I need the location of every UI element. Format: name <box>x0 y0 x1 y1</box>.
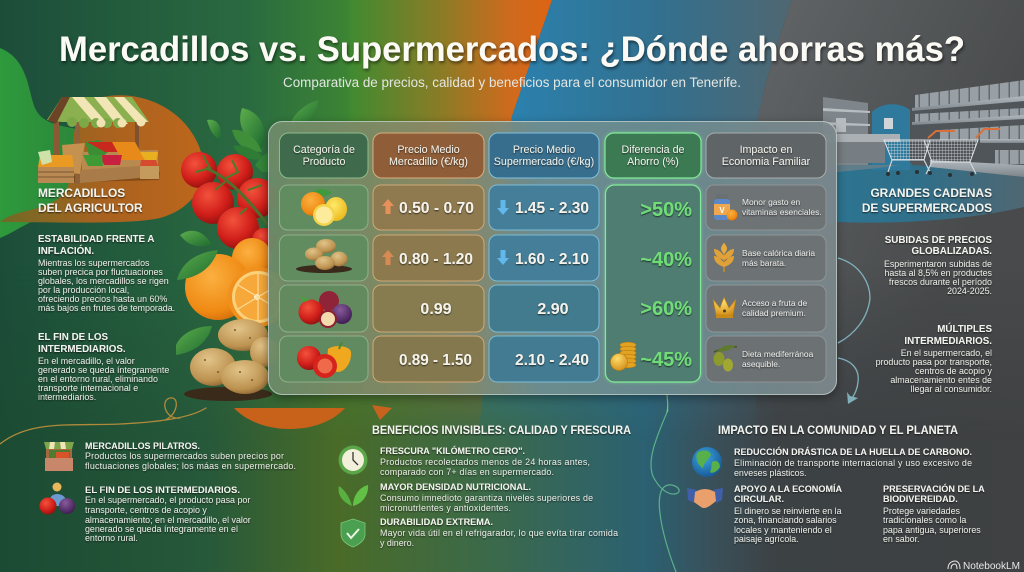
column: mercadillo prices: 0.80 - 1.20 <box>399 251 473 268</box>
column: family impact: calidad premium. <box>742 308 806 318</box>
column: family impact: Dieta mediferránoa <box>742 349 814 359</box>
block: mercadillos pilatros: Productos los supermercados suben precios por <box>85 451 284 461</box>
column: savings: ~45% <box>640 349 692 371</box>
subtitle: Comparativa de precios, calidad y beneficios para el consumidor en Tenerife. <box>283 75 741 90</box>
logo: NotebookLM: NotebookLM <box>963 560 1020 572</box>
block: intermediaries <box>38 332 169 402</box>
column: savings: Diferencia de <box>622 144 685 156</box>
column: supermercado prices: Supermercado (€/kg) <box>494 156 594 168</box>
illustration: potatoes <box>176 319 278 401</box>
column: family impact: vitaminas esenciales. <box>742 207 822 217</box>
block: end of intermediaries: entorno rural. <box>85 533 138 543</box>
block: freshness: comparado con 7+ días en supermercado. <box>380 467 554 477</box>
block: inflation: más bajos en frutes de temporada. <box>38 303 175 313</box>
column: savings <box>605 133 701 382</box>
icon: mini market stall <box>44 442 74 471</box>
block: biodiversity: tradicionales como la <box>883 515 966 525</box>
block: inflation: INFLACIÓN. <box>38 245 94 257</box>
icon: vitamin bottle: V <box>719 206 725 215</box>
block: price rises: 2024-2025. <box>947 286 992 296</box>
block: price rises: Esperimentaron subidas de <box>884 259 992 269</box>
block: circular economy <box>734 484 843 544</box>
block: circular economy: paisaje agrícola. <box>734 534 799 544</box>
heading: community and planet: IMPACTO EN LA COMUNIDAD Y EL PLANETA <box>718 423 958 437</box>
block: inflation: suben precica por fluctuaciones <box>38 267 163 277</box>
icon: shield <box>341 519 365 547</box>
block: biodiversity: PRESERVACIÓN DE LA <box>883 483 985 494</box>
illustration: shopping carts <box>884 129 1000 177</box>
block: end of intermediaries: EL FIN DE LOS INTERMEDIARIOS. <box>85 485 240 495</box>
block: nutrition: Consumo imnedioto garantiza niveles superiores de <box>380 493 593 503</box>
heading: supermarkets: GRANDES CADENAS <box>870 186 992 200</box>
block: nutrition: micronutrlentes y antioxidentes. <box>380 503 511 513</box>
block: circular economy: APOYO A LA ECONOMÍA <box>734 484 843 494</box>
block: carbon: Eliminación de transporte internacional y uso excesivo de <box>734 458 972 468</box>
block: carbon: enveses plásticos. <box>734 468 807 478</box>
block: circular economy: El dinero se reinvierte en la <box>734 506 842 516</box>
icon: citrus <box>301 189 347 226</box>
right column: supermarket text <box>862 186 993 394</box>
block: intermediaries: en el entorno rural, eliminando <box>38 374 158 384</box>
arrows: right of the panel <box>838 258 870 404</box>
block: intermediaries: INTERMEDIARIOS. <box>38 344 126 355</box>
icon: handshake <box>687 488 723 508</box>
column: mercadillo prices: 0.50 - 0.70 <box>399 200 474 217</box>
column: mercadillo prices: 0.89 - 1.50 <box>399 352 472 369</box>
column: family impact: Monor gasto en <box>742 197 801 207</box>
heading: mercadillos: MERCADILLOS <box>38 186 125 200</box>
block: intermediaries: EL FIN DE LOS <box>38 332 109 343</box>
column: family impact: Acceso a fruta de <box>742 298 808 308</box>
panel: comparison table <box>268 122 836 394</box>
block: multiple intermediaries: almacenamiento entes de <box>890 375 992 385</box>
icon: olives <box>714 345 737 372</box>
illustration: leaves above produce <box>207 100 318 172</box>
block: biodiversity: BIODIVEREIDAD. <box>883 494 958 504</box>
block: carbon <box>734 446 972 478</box>
block: durability: y dinero. <box>380 538 414 548</box>
icon: potatoes on soil <box>296 239 352 273</box>
left column: mercadillos text <box>38 186 175 402</box>
block: price rises: SUBIDAS DE PRECIOS <box>885 235 992 246</box>
block: end of intermediaries <box>85 485 251 543</box>
block: mercadillos pilatros <box>85 441 296 471</box>
block: multiple intermediaries: centros de acopio y <box>915 366 993 376</box>
block: multiple intermediaries: En el supermercado, el <box>901 348 992 358</box>
column: supermercado prices: 1.45 - 2.30 <box>515 200 589 217</box>
illustration: oranges <box>177 231 288 327</box>
block: biodiversity: Protege variedades <box>883 506 961 516</box>
icon: tomato and pepper <box>297 342 351 378</box>
icon: gold coins <box>610 342 636 370</box>
block: durability: DURABILIDAD EXTREMA. <box>380 517 493 527</box>
block: circular economy: zona, financiando salarios <box>734 515 837 525</box>
column: family impact: Impacto en <box>740 144 792 156</box>
block: nutrition <box>380 482 593 513</box>
column: family impact: Base calórica diaria <box>742 248 815 258</box>
block: freshness: FRESCURA "KILÓMETRO CERO". <box>380 445 525 456</box>
block: durability <box>380 517 618 548</box>
column: family impact: más barata. <box>742 258 786 268</box>
block: multiple intermediaries: llegar al consumidor. <box>911 384 992 394</box>
block: freshness <box>380 445 590 477</box>
block: nutrition: MAYOR DENSIDAD NUTRICIONAL. <box>380 482 531 492</box>
icon: wheat <box>714 243 734 272</box>
heading: supermarkets: DE SUPERMERCADOS <box>862 201 992 215</box>
decorative curves <box>0 395 679 572</box>
column: categories: Categoría de <box>293 144 355 156</box>
heading: mercadillos: DEL AGRICULTOR <box>38 201 143 215</box>
icon: globe <box>692 447 722 477</box>
block: inflation: por la producción local, <box>38 285 129 295</box>
block: multiple intermediaries: MÚLTIPLES <box>937 323 992 335</box>
column: savings: ~40% <box>640 249 692 271</box>
column: supermercado prices: 1.60 - 2.10 <box>515 251 589 268</box>
block: intermediaries: transporte internacional e <box>38 383 138 393</box>
block: price rises: GLOBALIZADAS. <box>911 246 992 257</box>
column: mercadillo prices <box>373 133 484 382</box>
column: family impact <box>706 133 826 382</box>
column: savings: Ahorro (%) <box>627 156 679 168</box>
block: multiple intermediaries: producto pasa por transporte, <box>876 357 992 367</box>
icon: vitamin bottle <box>714 194 738 220</box>
icon: clock <box>338 446 368 474</box>
icon: person and fruits <box>40 482 75 514</box>
column: family impact: asequible. <box>742 359 780 369</box>
column: savings: >50% <box>640 199 692 221</box>
block: mercadillos pilatros: fluctuaciones globales; los máas en supermercado. <box>85 461 296 471</box>
block: biodiversity: papa antigua, superiores <box>883 525 981 535</box>
block: inflation: ESTABILIDAD FRENTE A <box>38 234 154 245</box>
block: carbon: REDUCCIÓN DRÁSTICA DE LA HUELLA DE CARBONO. <box>734 446 972 457</box>
block: multiple intermediaries <box>876 323 993 394</box>
block: inflation: ofreciendo precios hasta un 60% <box>38 294 167 304</box>
column: family impact: Economia Familiar <box>722 156 811 168</box>
block: end of intermediaries: generado se queda íntegramente en el <box>85 524 238 534</box>
block: biodiversity: en sabor. <box>883 534 920 544</box>
illustration: market stall <box>38 97 160 184</box>
block: inflation <box>38 234 175 313</box>
title: Mercadillos vs. Supermercados: ¿Dónde ahorras más? <box>59 30 965 69</box>
column: categories: Producto <box>303 156 345 168</box>
block: price rises: hasta al 8,5% en productes <box>884 268 993 278</box>
block: intermediaries: intermediarios. <box>38 392 96 402</box>
block: durability: Mayor vida útil en el refrigarador, lo que evíta tirar comida <box>380 528 618 538</box>
column: mercadillo prices: Mercadillo (€/kg) <box>389 156 468 168</box>
illustration: supermarket shelves and checkout <box>760 80 1024 177</box>
block: intermediaries: generado se queda íntegramente <box>38 365 169 375</box>
icon: leaves <box>339 485 368 506</box>
column: supermercado prices <box>489 133 599 382</box>
block: inflation: globales, los mercadillos se rigen <box>38 276 169 286</box>
column: mercadillo prices: 0.99 <box>420 301 452 318</box>
icon: apples and plum <box>298 291 352 328</box>
block: biodiversity <box>883 483 985 544</box>
block: mercadillos pilatros: MERCADILLOS PILATROS. <box>85 441 200 451</box>
block: end of intermediaries: almacenamiento; en el mercadillo, el valor <box>85 515 251 525</box>
block: end of intermediaries: transporte, centros de acopio y <box>85 505 207 515</box>
icon: crown <box>713 297 736 318</box>
block: inflation: Mientras los supermercados <box>38 258 150 268</box>
heading: invisible benefits: BENEFICIOS INVISIBLES: CALIDAD Y FRESCURA <box>372 423 631 437</box>
block: multiple intermediaries: INTERMEDIARIOS. <box>904 336 992 347</box>
block: intermediaries: En el mercadillo, el valor <box>38 356 135 366</box>
column: supermercado prices: 2.10 - 2.40 <box>515 352 589 369</box>
column: savings: >60% <box>640 298 692 320</box>
column: mercadillo prices: Precio Medio <box>397 144 460 156</box>
block: price rises <box>884 235 993 296</box>
block: end of intermediaries: En el supermercado, el producto pasa por <box>85 495 250 505</box>
column: supermercado prices: 2.90 <box>537 301 569 318</box>
block: freshness: Productos recolectados menos de 24 horas antes, <box>380 457 590 467</box>
column: categories <box>280 133 368 382</box>
block: circular economy: locales y manteniendo el <box>734 525 832 535</box>
block: price rises: frescos durante el período <box>889 277 992 287</box>
column: supermercado prices: Precio Medio <box>513 144 575 156</box>
block: circular economy: CIRCULAR. <box>734 494 784 504</box>
illustration: tomatoes <box>181 152 277 252</box>
arrow: orange pointer <box>372 405 392 420</box>
